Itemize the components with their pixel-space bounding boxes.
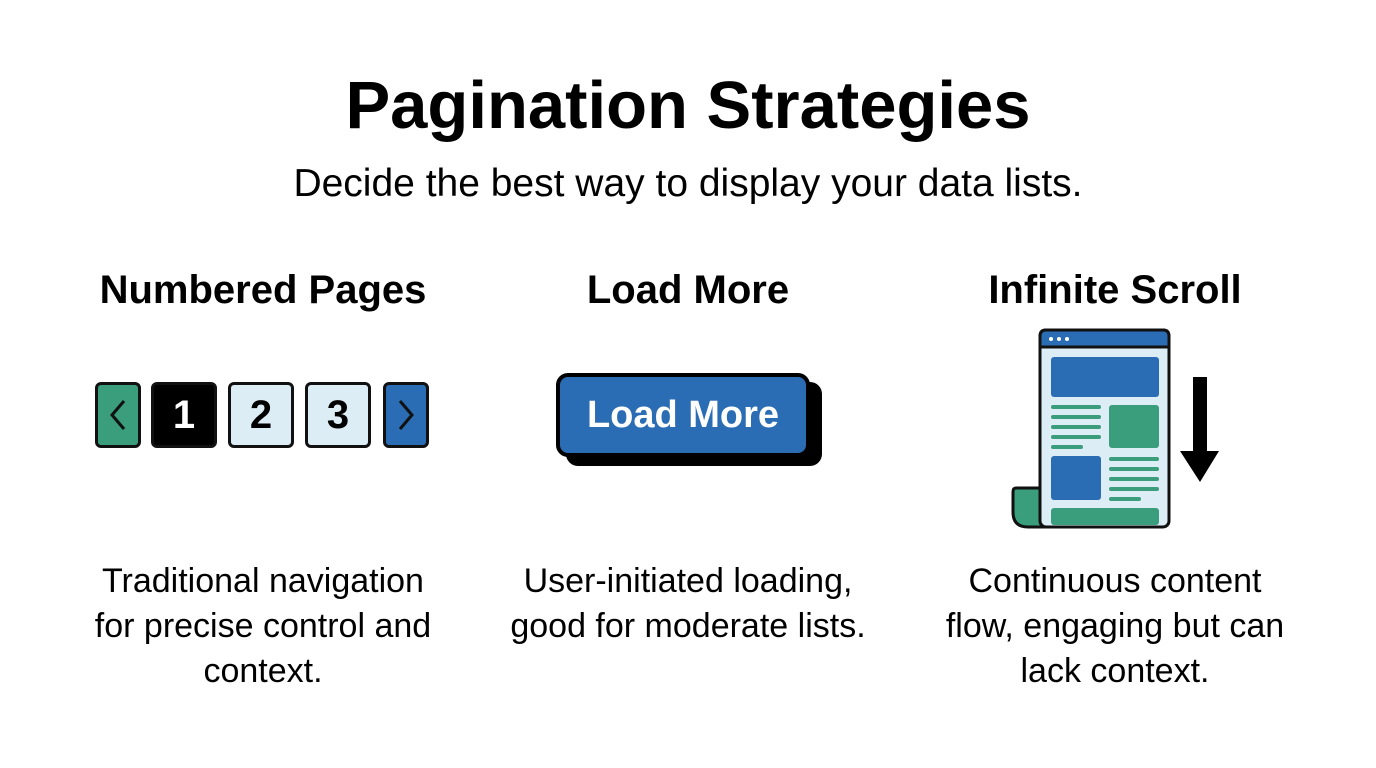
text: infinite scroll: lack context. [1020, 652, 1209, 690]
text: load more [510, 562, 866, 645]
text: load more: good for moderate lists. [510, 607, 866, 645]
load more button: Load More [587, 394, 779, 436]
text: numbered pages: for precise control and [95, 607, 431, 645]
page 1 [151, 382, 217, 448]
text: load more: User-initiated loading, [524, 562, 852, 600]
heading: infinite scroll: Infinite Scroll [988, 268, 1242, 312]
icon: infinite scroll page [1012, 328, 1219, 528]
curl [1013, 488, 1044, 527]
page 3 [305, 382, 371, 448]
text: infinite scroll: Continuous content [968, 562, 1261, 600]
next button [383, 382, 429, 448]
prev button [95, 382, 141, 448]
load more button [556, 373, 822, 466]
page 1: 1 [173, 393, 195, 437]
text: numbered pages: Traditional navigation [102, 562, 424, 600]
heading: numbered pages: Numbered Pages [100, 268, 426, 312]
page 3: 3 [327, 393, 349, 437]
heading: load more: Load More [587, 268, 789, 312]
page 2 [228, 382, 294, 448]
arrow down [1180, 377, 1219, 482]
title: Pagination Strategies [345, 68, 1031, 143]
page 2: 2 [250, 393, 272, 437]
text: infinite scroll: flow, engaging but can [946, 607, 1284, 645]
text: numbered pages [95, 562, 431, 690]
text: infinite scroll [946, 562, 1284, 690]
pagination control [95, 382, 429, 448]
text: numbered pages: context. [203, 652, 323, 690]
subtitle: Decide the best way to display your data lists. [293, 162, 1083, 205]
